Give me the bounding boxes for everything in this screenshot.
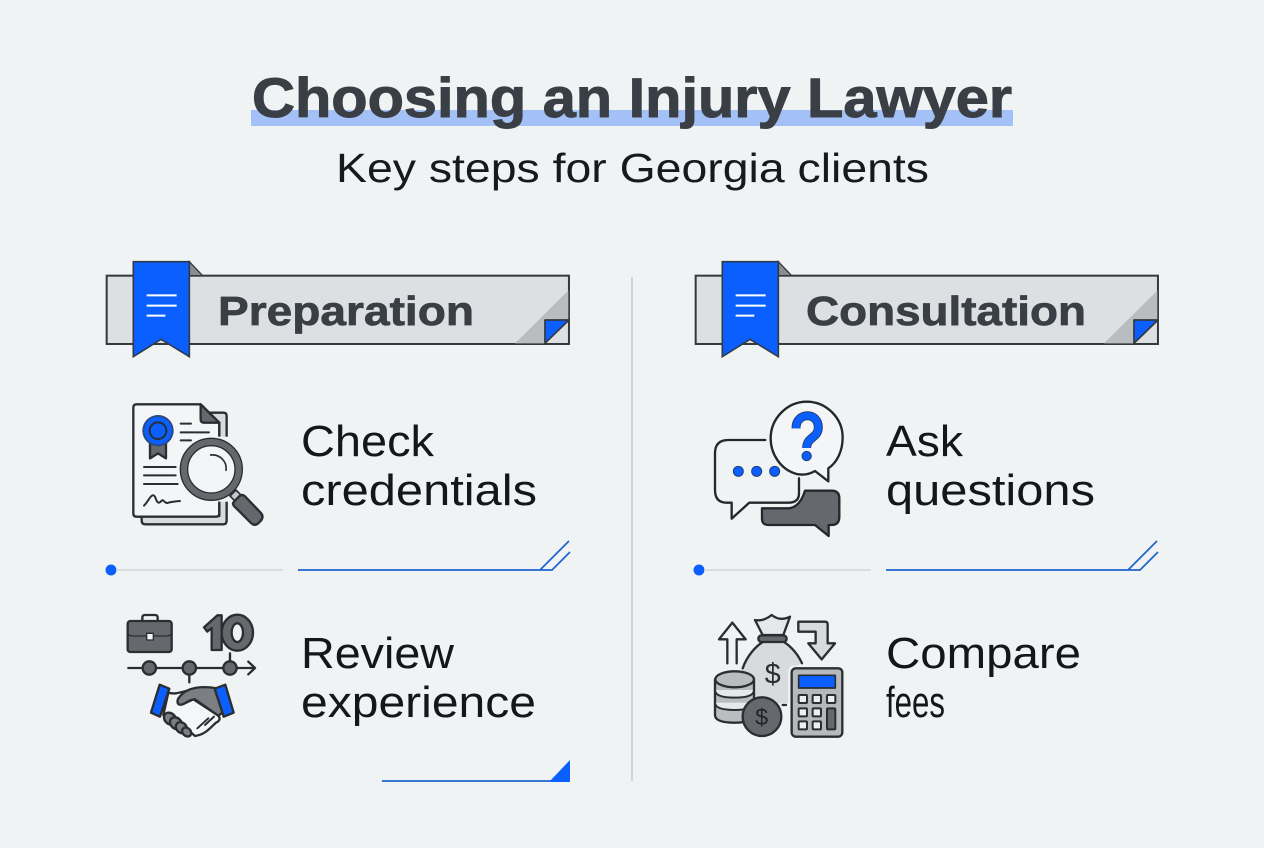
subtitle: Key steps for Georgia clients <box>336 145 929 191</box>
banner: Consultation: Consultation <box>806 288 1086 334</box>
corner accent: bottom left column <box>382 760 570 782</box>
banner: Consultation <box>696 262 1158 357</box>
text: Check credentials: Check <box>301 417 435 466</box>
text: Ask questions: questions <box>886 466 1095 515</box>
text: Check credentials <box>301 417 537 515</box>
icon: fees money bag, coins and calculator: $ <box>755 704 768 730</box>
separator: left column <box>106 541 570 576</box>
icon: fees money bag, coins and calculator <box>715 615 845 739</box>
icon: questions speech bubbles <box>715 402 843 536</box>
text: Compare fees: Compare <box>886 629 1081 678</box>
text: Review experience <box>301 629 536 727</box>
icon: credentials document with magnifier <box>133 404 262 525</box>
text: Review experience: experience <box>301 678 536 727</box>
icon: fees money bag, coins and calculator: $ <box>765 658 781 690</box>
title: Choosing an Injury Lawyer <box>252 66 1012 129</box>
text: Review experience: Review <box>301 629 454 678</box>
text: Compare fees <box>886 629 1081 727</box>
separator: right column <box>694 541 1158 576</box>
banner: Preparation <box>107 262 569 357</box>
text: Ask questions <box>886 417 1095 515</box>
text: Ask questions: Ask <box>886 417 964 466</box>
banner: Preparation: Preparation <box>218 288 474 334</box>
icon: experience briefcase, timeline and handshake <box>128 615 255 738</box>
text: Check credentials: credentials <box>301 466 537 515</box>
text: Compare fees: fees <box>886 678 945 727</box>
center divider <box>631 277 633 781</box>
